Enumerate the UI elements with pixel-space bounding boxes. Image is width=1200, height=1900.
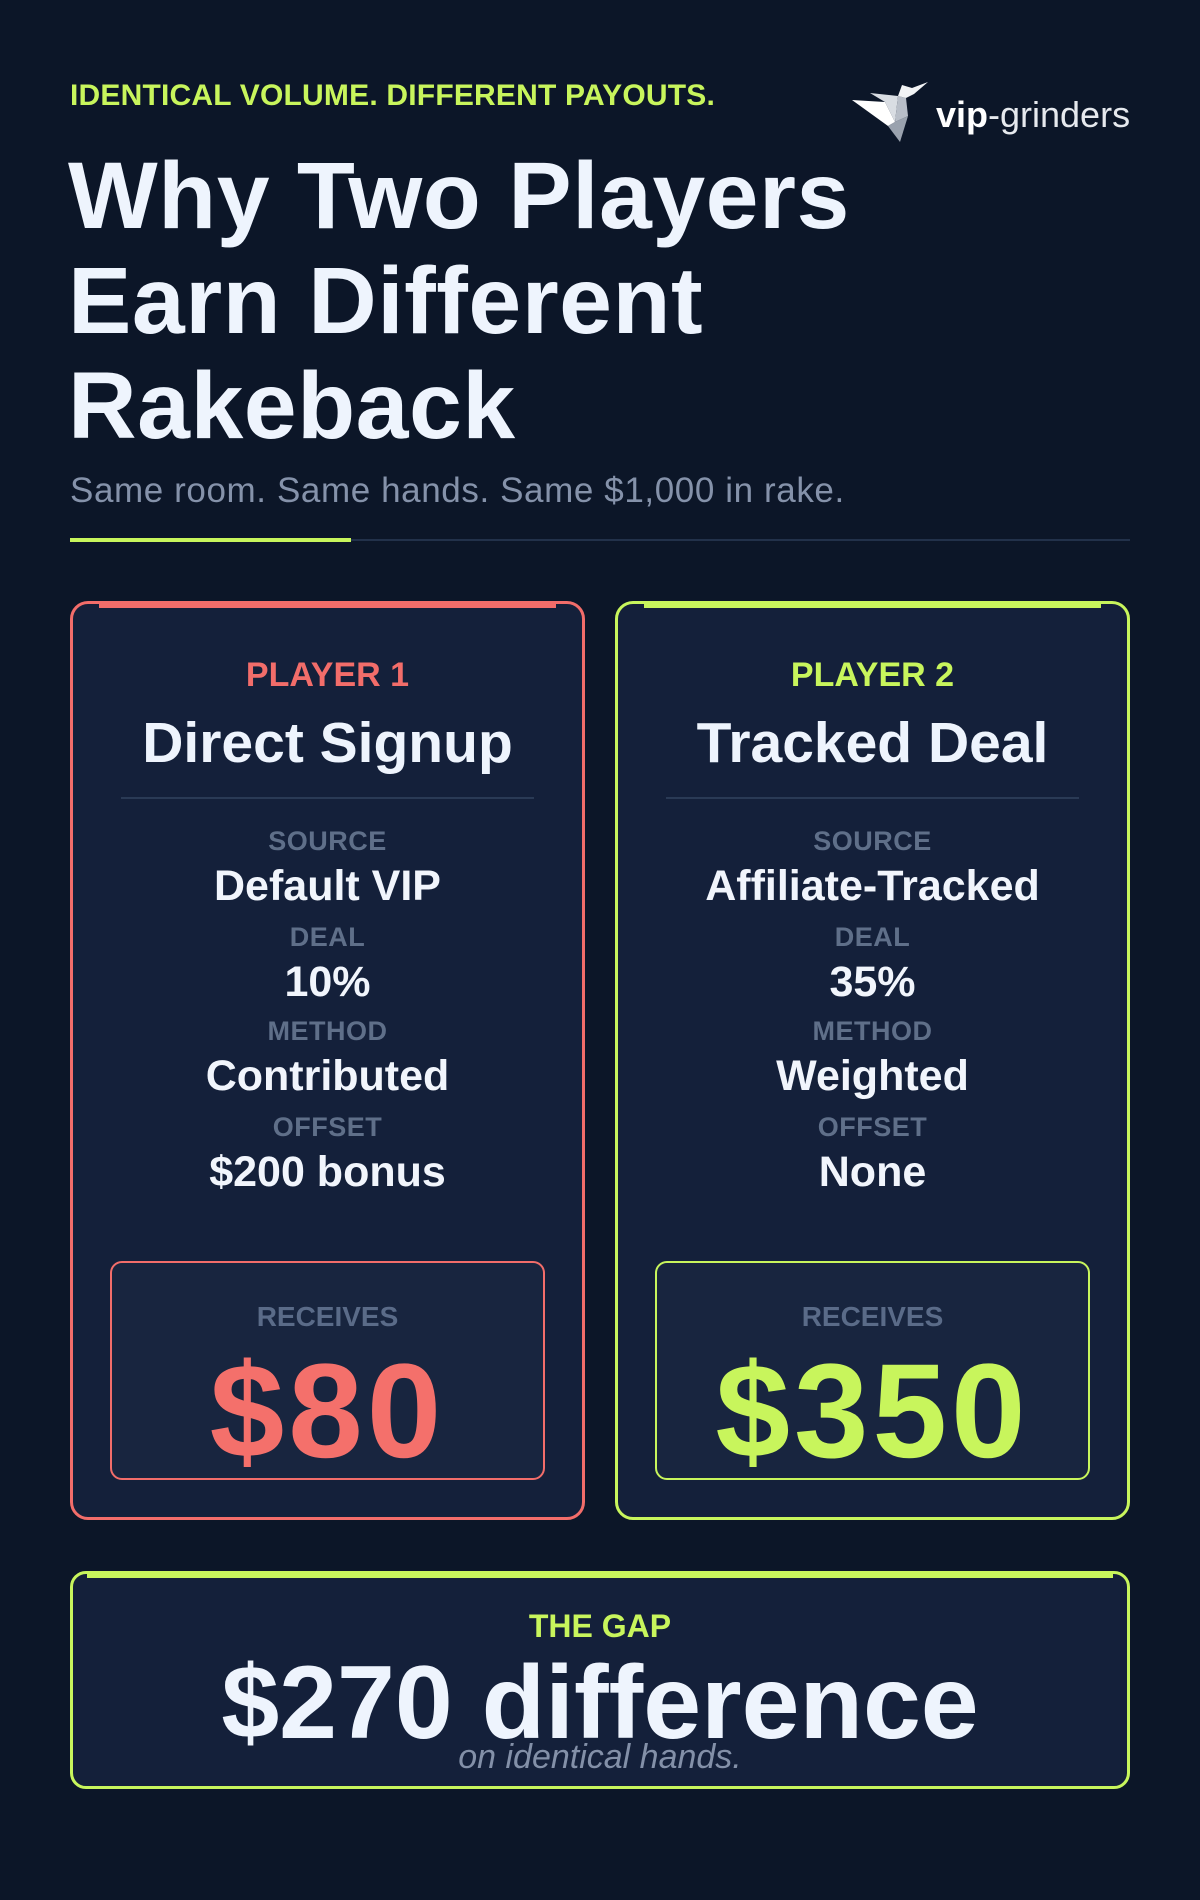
panel: player 1: OFFSET — [273, 1112, 382, 1142]
gap caption: on identical hands. — [458, 1738, 742, 1776]
panel: player 1: DEAL — [290, 922, 365, 952]
logo: vip-grinders — [852, 82, 1130, 142]
panel: player 1: 10% — [284, 958, 371, 1006]
panel: player 1: $200 bonus — [209, 1148, 446, 1196]
player 2 label: PLAYER 2 — [791, 656, 954, 694]
receives box: $350 — [655, 1261, 1090, 1480]
panel: player 2: SOURCE — [813, 826, 932, 856]
player 1 name: Direct Signup — [142, 711, 513, 775]
panel: player 2: 35% — [829, 958, 916, 1006]
title: Why Two Players — [68, 143, 850, 249]
panel: player 1: Contributed — [206, 1052, 449, 1100]
title: Rakeback — [68, 353, 516, 459]
panel: player 2: METHOD — [812, 1016, 932, 1046]
icon: origami bird — [852, 82, 928, 142]
panel: player 1: METHOD — [268, 1016, 388, 1046]
receives box: $80: RECEIVES — [257, 1301, 398, 1332]
panel: player 2: DEAL — [835, 922, 910, 952]
player 1 details — [206, 826, 449, 1196]
panel: player 1: SOURCE — [268, 826, 387, 856]
player 2 name: Tracked Deal — [697, 711, 1048, 775]
title: Earn Different — [68, 248, 703, 354]
title — [68, 143, 850, 459]
player 2 details — [705, 826, 1040, 1196]
panel: player 2: Weighted — [776, 1052, 969, 1100]
logo text: vip-grinders — [936, 94, 1130, 135]
panel: the gap — [70, 1571, 1130, 1789]
header divider — [70, 539, 1130, 541]
panel: player 1: Default VIP — [214, 862, 441, 910]
panel: player 2: None — [819, 1148, 926, 1196]
panel: player 1 — [70, 601, 585, 1520]
receives box: $350: RECEIVES — [802, 1301, 943, 1332]
receives box: $80 — [110, 1261, 545, 1480]
gap label: THE GAP — [529, 1608, 671, 1644]
panel: player 2: OFFSET — [818, 1112, 927, 1142]
tagline: IDENTICAL VOLUME. DIFFERENT PAYOUTS. — [70, 79, 715, 112]
subtitle: Same room. Same hands. Same $1,000 in rake. — [70, 471, 845, 510]
player 1 label: PLAYER 1 — [246, 656, 409, 694]
gap value: $270 difference — [221, 1645, 979, 1761]
receives box: $80: $80 — [210, 1337, 445, 1486]
panel: player 2: Affiliate-Tracked — [705, 862, 1040, 910]
receives box: $350: $350 — [715, 1337, 1030, 1486]
panel: player 2 — [615, 601, 1130, 1520]
